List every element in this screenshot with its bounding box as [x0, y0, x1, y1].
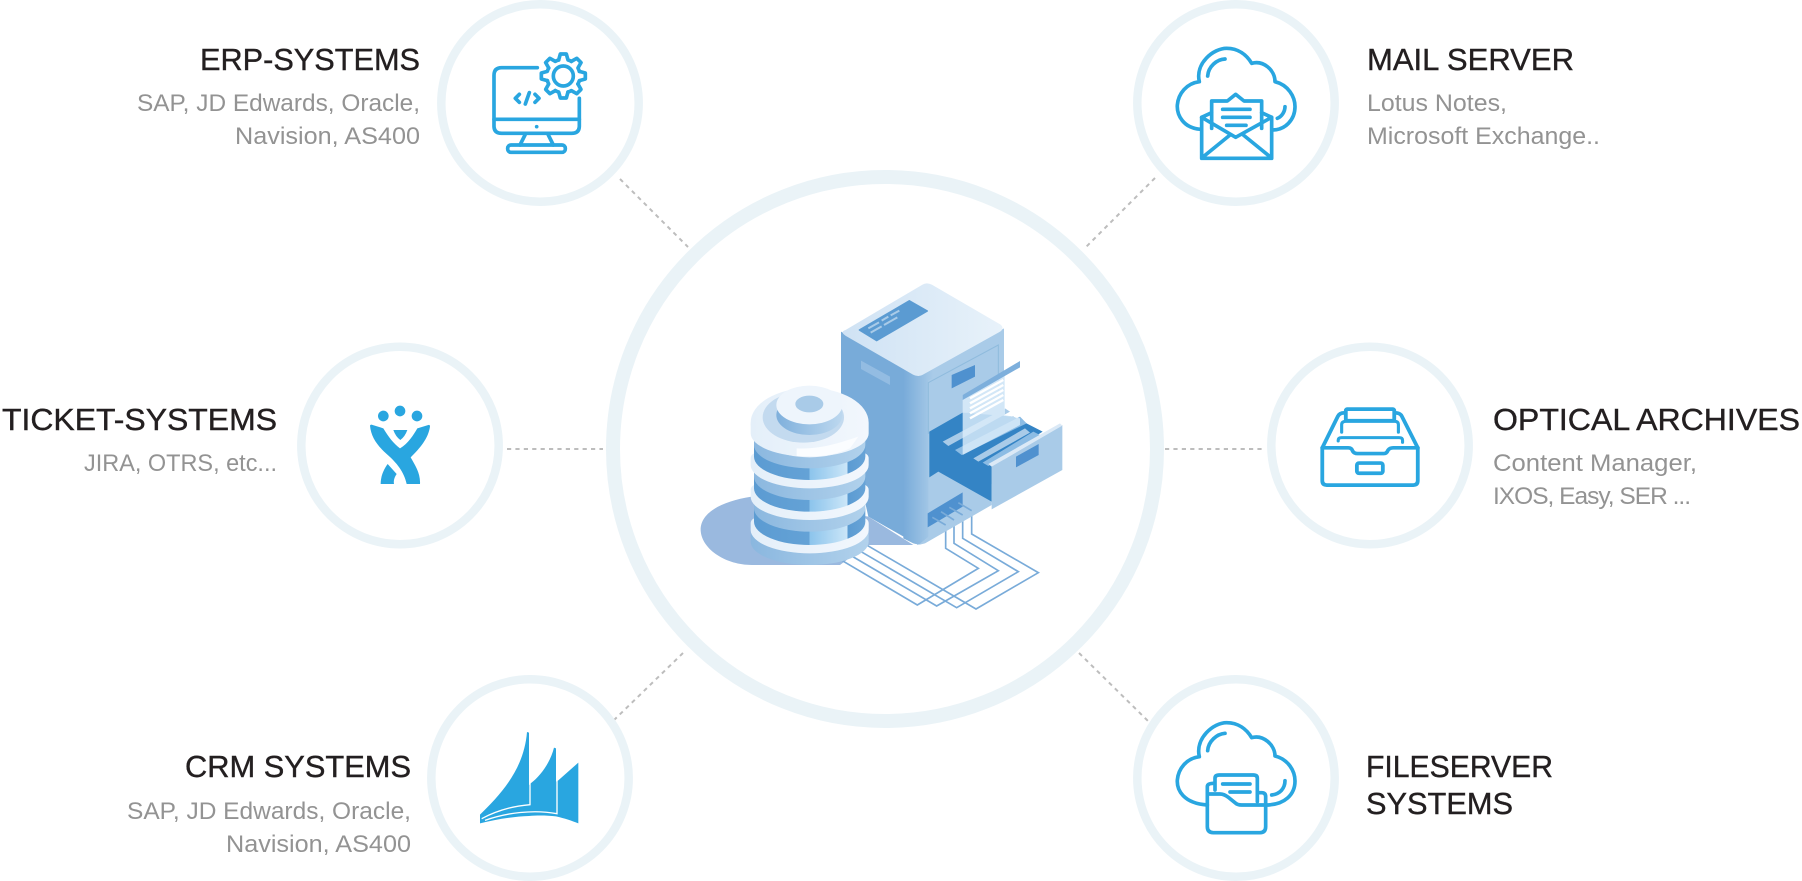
- heading: FILESERVER: [1366, 749, 1553, 784]
- central illustration: archive cabinet and database: [701, 284, 1062, 609]
- description: SAP, JD Edwards, Oracle,: [137, 90, 420, 117]
- icon: monitor with gear: [494, 54, 585, 152]
- central ring: [613, 177, 1157, 721]
- connector: ERP to centre: [620, 179, 688, 247]
- ring: [1271, 347, 1469, 544]
- open drawer: [929, 408, 1062, 509]
- heading: TICKET-SYSTEMS: [2, 402, 277, 437]
- description: Lotus Notes,: [1367, 90, 1507, 117]
- connector: fileserver to centre: [1079, 653, 1149, 722]
- description: SAP, JD Edwards, Oracle,: [127, 798, 411, 825]
- icon: archive tray: [1322, 409, 1418, 485]
- heading: ERP-SYSTEMS: [200, 42, 420, 77]
- description: Content Manager,: [1493, 450, 1697, 477]
- connector: mail to centre: [1086, 178, 1155, 247]
- heading: CRM SYSTEMS: [185, 749, 411, 784]
- panel: mail server: [1137, 4, 1600, 202]
- icon: Dynamics sails: [480, 732, 578, 823]
- description: [1493, 450, 1697, 510]
- description: [1367, 90, 1600, 150]
- heading: OPTICAL ARCHIVES: [1493, 402, 1800, 437]
- floating document: [963, 361, 1020, 455]
- description: Navision, AS400: [226, 831, 411, 858]
- panel: ticket systems: [2, 347, 499, 544]
- database stack: [751, 386, 869, 565]
- description: IXOS, Easy, SER ...: [1493, 483, 1691, 510]
- description: Navision, AS400: [235, 123, 420, 150]
- ring: [441, 4, 639, 202]
- description: JIRA, OTRS, etc...: [84, 450, 277, 477]
- heading: [1366, 749, 1553, 821]
- heading: SYSTEMS: [1366, 786, 1513, 821]
- description: [137, 90, 420, 150]
- ring: [301, 347, 499, 544]
- port wire stubs: [932, 503, 972, 525]
- icon: cloud with envelope: [1177, 48, 1295, 158]
- description: [127, 798, 411, 858]
- icon: JIRA logo: [370, 406, 430, 484]
- description: Microsoft Exchange..: [1367, 123, 1600, 150]
- cable port: [928, 492, 963, 527]
- wires: [840, 503, 1038, 609]
- ring: [431, 679, 629, 877]
- connector: optical to centre: [1165, 448, 1262, 450]
- panel: CRM systems: [127, 679, 629, 877]
- panel: fileserver systems: [1137, 679, 1553, 877]
- cabinet body: [841, 284, 1004, 545]
- floor shadow: [701, 497, 913, 565]
- panel: optical archives: [1271, 347, 1800, 544]
- connector: ticket to centre: [507, 448, 603, 450]
- connector: CRM to centre: [612, 653, 683, 722]
- ring: [1137, 4, 1335, 202]
- icon: cloud with folder: [1177, 723, 1295, 833]
- heading: MAIL SERVER: [1367, 42, 1574, 77]
- ring: [1137, 679, 1335, 877]
- panel: ERP systems: [137, 4, 639, 202]
